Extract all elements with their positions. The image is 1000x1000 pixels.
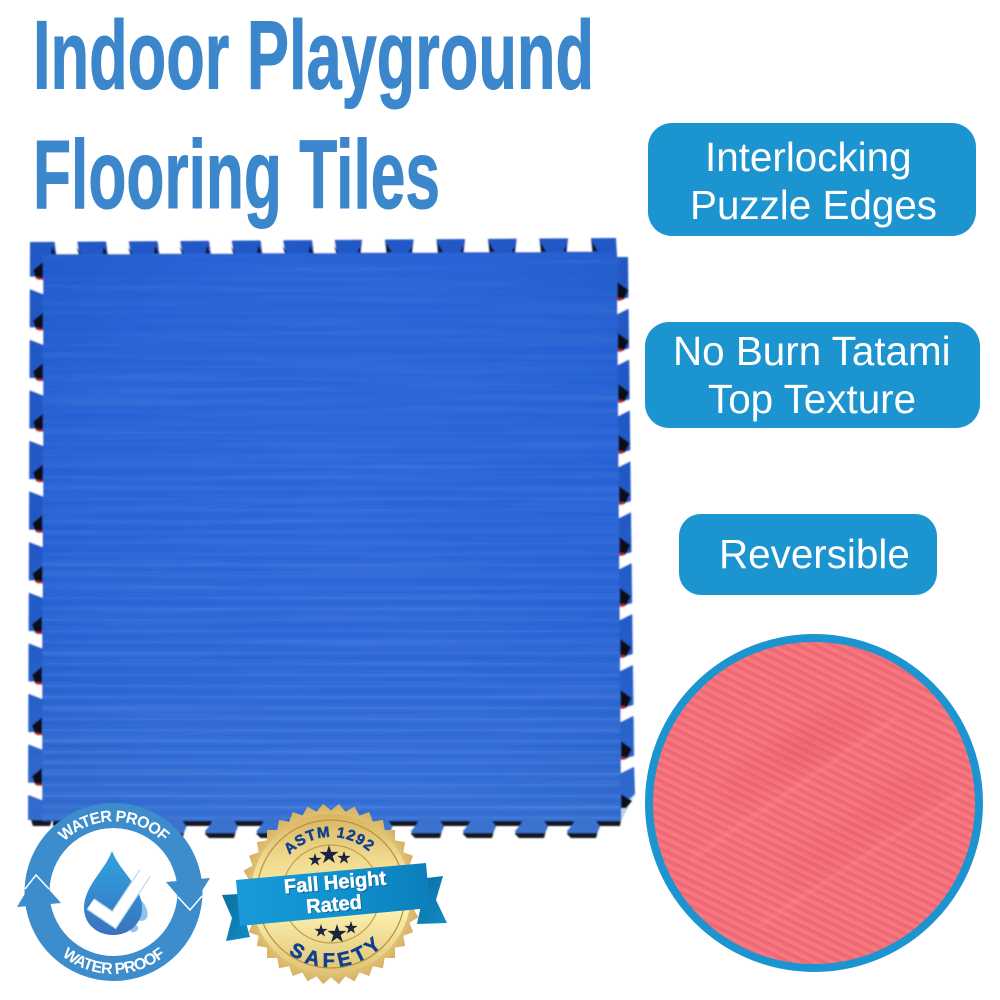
gold seal (241, 804, 421, 984)
icon: left circular arrow (17, 875, 61, 907)
ribbon band (236, 863, 430, 926)
arc text: ASTM 1292: ASTM 1292 (285, 826, 374, 855)
curved text: bottom: WATER PROOF (64, 946, 163, 974)
ribbon text: Rated (307, 893, 364, 919)
circle: red reverse side texture (649, 638, 979, 968)
icon: upper stars (308, 845, 351, 866)
pill: interlocking puzzle edges: Interlocking (705, 134, 912, 180)
title line 1: Indoor Playground (33, 0, 594, 110)
ribbon text (283, 868, 388, 919)
title line 2: Flooring Tiles (33, 120, 440, 229)
badge: water proof (17, 803, 210, 981)
icon: splash drops (130, 898, 148, 932)
arc text: SAFETY: SAFETY (290, 936, 378, 968)
pill: reversible: Reversible (719, 531, 910, 577)
title (33, 0, 594, 229)
pill: no burn tatami top texture: Top Texture (708, 376, 916, 422)
icon: right circular arrow (166, 878, 210, 910)
badge: safety seal (222, 804, 447, 984)
pill: reversible (679, 514, 937, 595)
icon: water drop (84, 851, 142, 935)
pill: no burn tatami top texture: No Burn Tatami (673, 328, 951, 374)
pill: interlocking puzzle edges: Puzzle Edges (690, 182, 937, 228)
pill: no burn tatami top texture (645, 322, 980, 428)
flooring tile (24, 232, 639, 838)
ribbon text: Fall Height (284, 869, 388, 900)
curved text: top: WATER PROOF (57, 810, 170, 840)
ribbon text: Rated (305, 892, 363, 918)
icon: lower stars (314, 921, 358, 942)
ribbon text: Fall Height (283, 868, 387, 898)
ribbon tails (222, 894, 250, 941)
pill: interlocking puzzle edges (648, 123, 976, 236)
icon: check mark (90, 873, 145, 920)
